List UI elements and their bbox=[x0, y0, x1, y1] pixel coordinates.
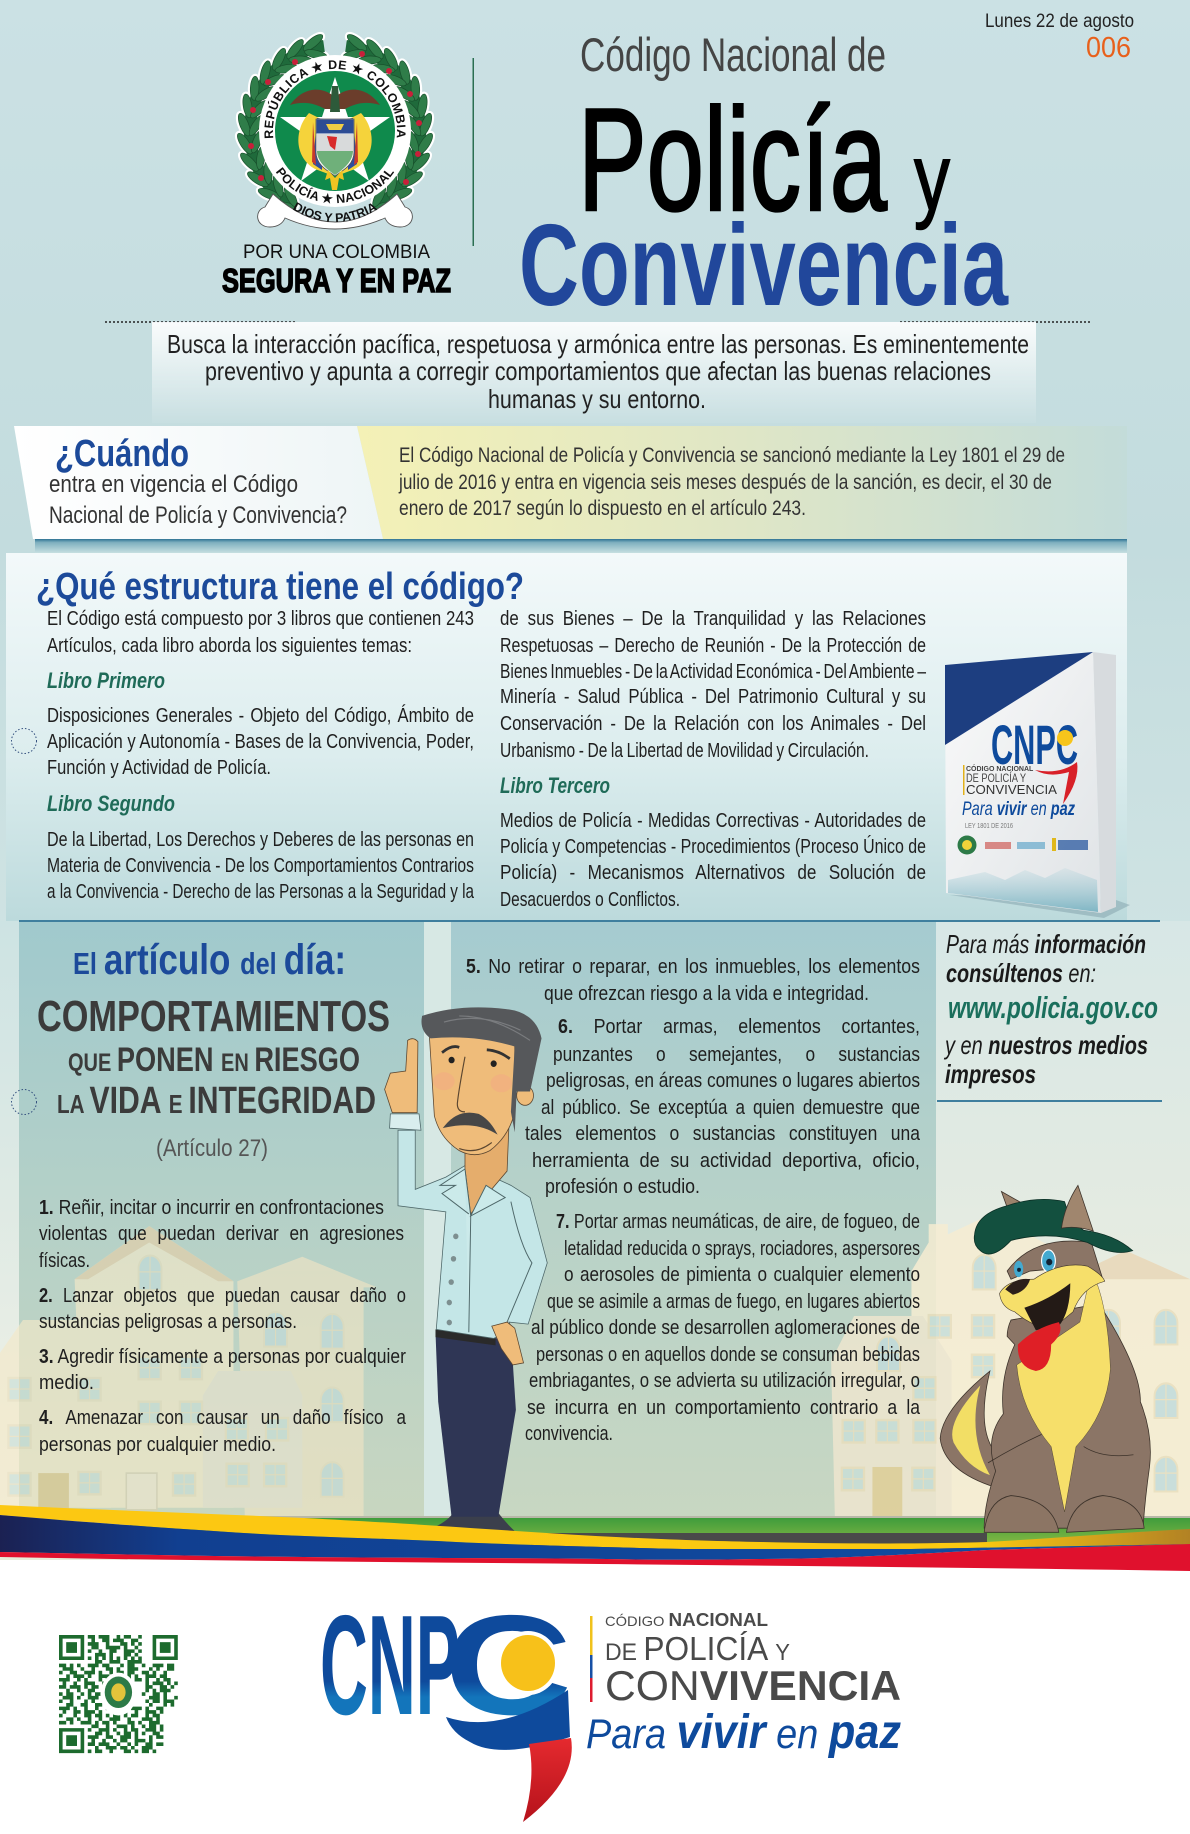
icon: dotted circle bbox=[12, 728, 36, 754]
icon: book cover: DE POLICÍA Y bbox=[966, 770, 1026, 785]
text block: left column: Artículos, cada libro aborda los siguientes temas: bbox=[47, 634, 412, 657]
title bbox=[472, 28, 1009, 330]
text block: comportamientos 5 a 7: o aerosoles de pimienta o cualquier elemento bbox=[564, 1263, 920, 1286]
panel: introduction: humanas y su entorno. bbox=[488, 384, 706, 414]
text block: right column: de sus Bienes – De la Tranquilidad y las Relaciones bbox=[500, 607, 926, 630]
text block: comportamientos 1 a 4: físicas. bbox=[39, 1249, 90, 1272]
panel: estructura del código bbox=[6, 553, 1130, 921]
text block: right column bbox=[500, 607, 926, 911]
logo wordmark bbox=[586, 1610, 901, 1759]
illustration: houses left bbox=[0, 1226, 377, 1520]
panel: introduction bbox=[105, 322, 1091, 423]
text block: comportamientos 5 a 7: convivencia. bbox=[525, 1422, 613, 1445]
text block: left column: Aplicación y Autonomía - Bases de la Convivencia, Poder, bbox=[47, 730, 474, 753]
text block: comportamientos 5 a 7: tales elementos o sustancias constituyen una bbox=[525, 1122, 921, 1145]
panel: artículo del día heading: QUE PONEN EN RIESGO bbox=[68, 1041, 360, 1079]
illustration: man bbox=[385, 1007, 547, 1531]
icon: book cover: CONVIVENCIA bbox=[966, 782, 1057, 797]
panel: artículo del día heading: El artículo del día: bbox=[73, 936, 346, 984]
text block: right column: Bienes Inmuebles - De la Actividad Económica - Del Ambiente – bbox=[500, 660, 926, 683]
text block: comportamientos 5 a 7: embriagantes, o se advierta su utilización irregular, o bbox=[529, 1369, 920, 1392]
text block: comportamientos 5 a 7: herramienta de su actividad deportiva, oficio, bbox=[532, 1149, 920, 1172]
logo wordmark: CÓDIGO NACIONAL bbox=[605, 1610, 768, 1630]
icon: Policía Nacional seal: DIOS Y PATRIA bbox=[293, 202, 378, 222]
illustration: houses right bbox=[831, 1214, 1190, 1520]
icon: Policía Nacional seal bbox=[234, 32, 435, 230]
text block: left column: De la Libertad, Los Derechos y Deberes de las personas en bbox=[47, 828, 474, 851]
QR code bbox=[59, 1635, 178, 1753]
date and edition number: Lunes 22 de agosto bbox=[985, 11, 1134, 32]
logo wordmark: DE POLICÍA Y bbox=[605, 1630, 790, 1667]
text block: comportamientos 5 a 7: personas o en aquellos donde se consuman bebidas bbox=[536, 1343, 920, 1366]
panel: cuándo: julio de 2016 y entra en vigencia seis meses después de la sanción, es decir, el 30 de bbox=[398, 471, 1052, 494]
text block: right column: Libro Tercero bbox=[500, 773, 610, 798]
callout: más información: consúltenos en: bbox=[946, 958, 1096, 988]
callout: más información: impresos bbox=[945, 1059, 1036, 1089]
logo mark: C bbox=[444, 1586, 572, 1745]
callout: más información: y en nuestros medios bbox=[943, 1030, 1148, 1060]
panel: cuándo: entra en vigencia el Código bbox=[49, 471, 298, 498]
title: Convivencia bbox=[519, 200, 1009, 330]
text block: comportamientos 1 a 4: sustancias peligrosas a personas. bbox=[39, 1310, 297, 1333]
flag ribbon bbox=[0, 1505, 1190, 1571]
text block: right column: Policía y Competencias - Procedimientos (Proceso Único de bbox=[500, 835, 926, 858]
text block: comportamientos 5 a 7: punzantes o semejantes, o sustancias bbox=[553, 1043, 920, 1066]
text block: comportamientos 1 a 4: personas por cualquier medio. bbox=[39, 1433, 276, 1456]
logo wordmark: CONVIVENCIA bbox=[605, 1662, 901, 1709]
panel: artículo del día heading bbox=[37, 936, 390, 1162]
logo mark: CNP bbox=[320, 1586, 460, 1745]
text block: left column: Libro Segundo bbox=[47, 791, 175, 816]
title: Código Nacional de bbox=[580, 28, 886, 81]
slogan bbox=[222, 242, 451, 299]
text block: comportamientos 5 a 7: profesión o estudio. bbox=[545, 1175, 700, 1198]
icon: book cover: LEY 1801 DE 2016 bbox=[965, 823, 1013, 830]
ground and road bbox=[0, 1516, 1190, 1549]
text block: right column: Minería - Salud Pública - Del Patrimonio Cultural y su bbox=[500, 685, 926, 708]
date and edition number: 006 bbox=[1086, 32, 1131, 64]
heading: estructura: ¿Qué estructura tiene el código? bbox=[36, 566, 524, 608]
date and edition number bbox=[985, 11, 1134, 64]
illustration: dog mascot bbox=[940, 1185, 1150, 1532]
text block: comportamientos 5 a 7: letalidad reducida o sprays, rociadores, aspersores bbox=[564, 1237, 920, 1260]
panel: lower section backgrounds bbox=[0, 920, 1190, 1521]
text block: right column: Desacuerdos o Conflictos. bbox=[500, 888, 680, 911]
text block: comportamientos 5 a 7: 7. Portar armas neumáticas, de aire, de fogueo, de bbox=[556, 1210, 920, 1233]
text block: left column: El Código está compuesto por 3 libros que contienen 243 bbox=[47, 607, 474, 630]
text block: comportamientos 5 a 7: se incurra en un comportamiento contrario a la bbox=[527, 1396, 921, 1419]
panel: cuándo: Nacional de Policía y Convivencia? bbox=[49, 502, 347, 529]
panel: artículo del día heading: LA VIDA E INTEGRIDAD bbox=[57, 1080, 376, 1122]
panel: introduction: preventivo y apunta a corregir comportamientos que afectan las buenas relaciones bbox=[205, 356, 991, 386]
text block: comportamientos 1 a 4: 4. Amenazar con causar un daño físico a bbox=[39, 1406, 406, 1429]
text block: comportamientos 5 a 7: 5. No retirar o reparar, en los inmuebles, los elementos bbox=[466, 955, 920, 978]
slogan: SEGURA Y EN PAZ bbox=[222, 262, 451, 299]
icon: dotted circle bbox=[12, 1090, 36, 1114]
panel: artículo del día heading: (Artículo 27) bbox=[156, 1135, 268, 1162]
text block: comportamientos 5 a 7: al público donde se desarrollen aglomeraciones de bbox=[531, 1316, 920, 1339]
text block: comportamientos 1 a 4: 3. Agredir físicamente a personas por cualquier bbox=[39, 1345, 406, 1368]
text block: left column: a la Convivencia - Derecho de las Personas a la Seguridad y la bbox=[47, 880, 474, 903]
panel: cuándo bbox=[14, 426, 1127, 553]
logo: CNPC bbox=[320, 1586, 901, 1822]
panel: artículo del día heading: COMPORTAMIENTOS bbox=[37, 992, 390, 1041]
title: Policía bbox=[578, 78, 888, 241]
text block: comportamientos 1 a 4 bbox=[39, 1196, 406, 1456]
icon: book cover: CÓDIGO NACIONAL bbox=[966, 764, 1034, 773]
text block: comportamientos 1 a 4: 2. Lanzar objetos que puedan causar daño o bbox=[39, 1284, 406, 1307]
text block: comportamientos 5 a 7 bbox=[466, 955, 921, 1445]
text block: left column: Función y Actividad de Policía. bbox=[47, 756, 271, 779]
text block: comportamientos 5 a 7: que ofrezcan riesgo a la vida e integridad. bbox=[544, 982, 869, 1005]
text block: comportamientos 1 a 4: 1. Reñir, incitar o incurrir en confrontaciones bbox=[39, 1196, 384, 1219]
text block: comportamientos 1 a 4: violentas que puedan derivar en agresiones bbox=[39, 1222, 404, 1245]
slogan: POR UNA COLOMBIA bbox=[243, 242, 430, 263]
text block: left column: Materia de Convivencia - De los Comportamientos Contrarios bbox=[47, 854, 474, 877]
title: y bbox=[914, 125, 950, 231]
icon: Policía Nacional seal: POLICÍA ★ NACIONAL bbox=[276, 167, 394, 204]
logo tricolour bar bbox=[590, 1616, 592, 1702]
icon: book cover bbox=[945, 652, 1130, 918]
text block: left column bbox=[47, 607, 474, 903]
text block: right column: Conservación - De la Relación con los Animales - Del bbox=[500, 712, 926, 735]
panel: cuándo: ¿Cuándo bbox=[55, 433, 189, 475]
text block: left column: Disposiciones Generales - Objeto del Código, Ámbito de bbox=[47, 704, 474, 727]
text block: left column: Libro Primero bbox=[47, 668, 165, 693]
text block: comportamientos 5 a 7: al público. Se exceptúa a quien demuestre que bbox=[541, 1096, 920, 1119]
icon: book cover: CNPC bbox=[991, 713, 1078, 776]
logo wordmark: Para vivir en paz bbox=[586, 1706, 901, 1759]
callout: más información bbox=[937, 929, 1162, 1102]
icon: Policía Nacional seal: REPÚBLICA ★ DE ★ COLOMBIA bbox=[264, 60, 406, 138]
text block: comportamientos 5 a 7: peligrosas, en áreas comunes o lugares abiertos bbox=[546, 1069, 920, 1092]
text block: comportamientos 5 a 7: 6. Portar armas, elementos cortantes, bbox=[558, 1015, 920, 1038]
text block: right column: Respetuosas – Derecho de Reunión - De la Protección de bbox=[500, 634, 926, 657]
callout: más información: Para más información bbox=[946, 929, 1146, 959]
text block: right column: Policía) - Mecanismos Alternativos de Solución de bbox=[500, 861, 926, 884]
text block: comportamientos 1 a 4: medio. bbox=[39, 1371, 94, 1394]
logo mark bbox=[320, 1586, 572, 1822]
text block: comportamientos 5 a 7: que se asimile a armas de fuego, en lugares abiertos bbox=[547, 1290, 920, 1313]
text block: right column: Urbanismo - De la Libertad de Movilidad y Circulación. bbox=[500, 739, 869, 762]
text block: right column: Medios de Policía - Medidas Correctivas - Autoridades de bbox=[500, 809, 926, 832]
panel: cuándo: enero de 2017 según lo dispuesto en el artículo 243. bbox=[399, 497, 806, 520]
icon: book cover: Para vivir en paz bbox=[962, 799, 1075, 820]
